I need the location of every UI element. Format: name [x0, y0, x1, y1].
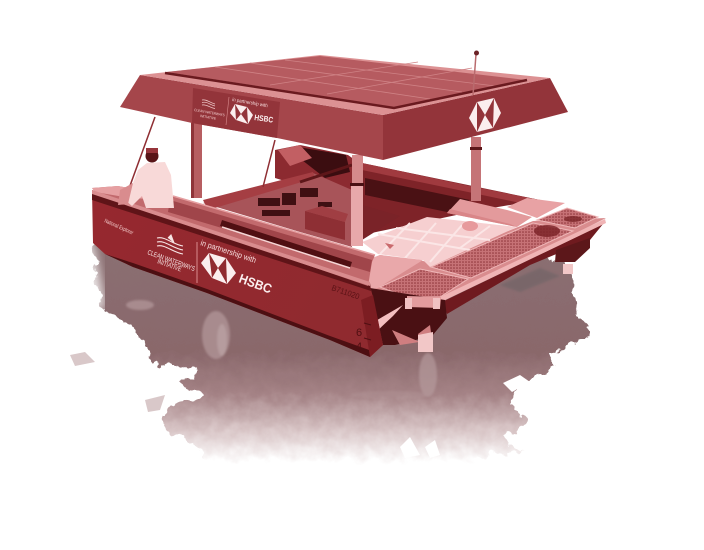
roof sponsor panel	[192, 88, 280, 138]
roof HSBC wordmark: HSBC	[254, 113, 274, 125]
draft marks: 6	[356, 327, 362, 339]
hull HSBC logo	[201, 253, 236, 284]
hull initiative name: INITIATIVE	[156, 258, 183, 274]
back hull and wheelhouse	[275, 145, 540, 235]
hull initiative name: CLEAN WATERWAYS	[146, 249, 196, 273]
rudder and equipment under stern	[372, 238, 590, 352]
solar panels	[165, 56, 527, 108]
rear deck blocks	[447, 198, 565, 227]
roof wave logo	[202, 100, 215, 108]
mast with ball	[473, 50, 479, 95]
water reflection	[70, 240, 592, 465]
hull initiative name	[146, 249, 196, 274]
roof initiative name: INITIATIVE	[200, 114, 217, 121]
draft marks: 4	[356, 341, 362, 353]
cabin posts	[191, 120, 482, 246]
roof partnership text: in partnership with	[232, 97, 268, 109]
roof small HSBC logo	[230, 104, 253, 124]
near-side walkway	[92, 186, 375, 286]
collection bins	[362, 217, 517, 267]
hull HSBC wordmark: HSBC	[237, 271, 275, 297]
roof initiative name: CLEAN WATERWAYS	[194, 108, 226, 117]
seated person	[118, 148, 174, 208]
grating deck panels	[350, 208, 598, 297]
wave logo on hull	[157, 235, 183, 254]
hull boat name: National Explorer	[103, 218, 134, 236]
cargo deck floor with tools	[203, 165, 400, 247]
hull side with lettering	[92, 186, 383, 357]
hull registration number: B711020	[330, 283, 361, 301]
roof canopy	[120, 50, 568, 160]
roof large HSBC logo	[469, 98, 501, 132]
support poles	[123, 117, 275, 205]
stern edge and right hull	[370, 219, 606, 345]
rear deck base	[350, 218, 606, 302]
hull partnership text: in partnership with	[199, 238, 257, 265]
draft marks	[356, 323, 371, 353]
